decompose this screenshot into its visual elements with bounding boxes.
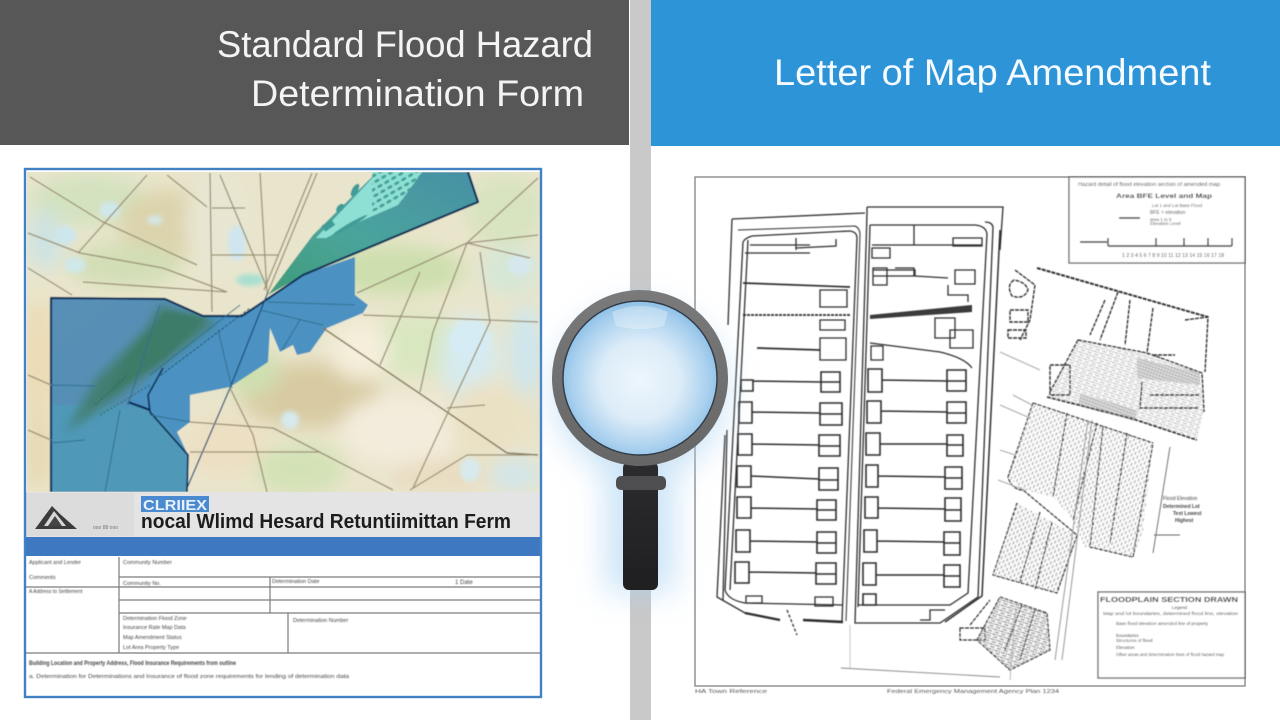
panel: letter of map amendment plan [695,177,1245,695]
icon: magnifying glass [552,290,728,592]
form table: Building Location and Property Address, Flood Insurance Requirements from outline [29,660,236,667]
plan annotation: Determined Lot [1163,504,1200,510]
form table: Lot Area Property Type [123,645,179,651]
inset: elevation detail box [1069,177,1245,263]
form table: 1 Date [455,580,473,586]
inset: elevation detail box: Elevation Level [1150,221,1181,226]
handle [623,462,658,590]
logo [26,493,134,536]
form blue band [26,537,541,556]
legend box: Elevation [1116,645,1135,650]
legend box: FLOODPLAIN SECTION DRAWN [1100,597,1238,604]
site plan: right block rows [863,369,966,605]
site plan: left block [717,213,865,635]
flood zone: green band [66,305,217,432]
form table: Insurance Rate Map Data [123,625,187,631]
form outer frame [25,169,541,697]
legend box [1098,592,1245,678]
lens highlight [612,306,668,329]
form table: A Address to Settlement [29,589,83,595]
form table: Comments [29,575,56,581]
header: Standard Flood Hazard Determination Form: Standard Flood Hazard [217,24,593,65]
legend box: Other areas and determination lines of flood hazard map [1116,652,1224,657]
form title [141,496,511,533]
flood map [20,165,550,495]
lines crossing the flood zone [51,302,355,492]
wedge [870,305,972,319]
site plan: left block rows [735,372,842,584]
header: Letter of Map Amendment [651,0,1280,146]
panel: flood hazard determination form [20,165,550,697]
boundary lines [51,172,478,492]
lens [563,301,717,455]
plan annotation [1163,496,1202,524]
form table: Determination Date [272,579,319,585]
inset: elevation detail box: Area BFE Level and Map [1116,194,1212,200]
form table: a. Determination for Determinations and Insurance of flood zone requirements for lending of determination data [29,674,350,680]
inset: elevation detail box: Lot 1 and Lot Base Flood [1152,203,1203,208]
rim [552,290,728,466]
inset: elevation detail box: 1 2 3 4 5 6 7 8 9 10 11 12 13 14 15 16 17 18 [1122,253,1224,259]
form table [26,556,541,696]
inset: elevation detail box: Hazard detail of flood elevation section of amended map [1078,182,1220,188]
form title: nocal Wlimd Hesard Retuntiimittan Ferm [141,511,511,533]
legend box: Legend [1172,605,1188,610]
plan annotation: Text Lowest [1173,511,1202,517]
form table: Determination Flood Zone [123,616,187,622]
legend box: Boundaries [1116,633,1140,638]
form table: Community No. [123,581,161,587]
plan sheet frame [695,177,1245,686]
plan footer notes: Federal Emergency Management Agency Plan 1234 [887,689,1059,695]
form table: Community Number [123,560,172,566]
flood zone: upper teal channel [268,172,478,295]
site plan: right block [855,207,1003,623]
magnifier glow [554,306,726,592]
form table: Determination Number [293,618,348,624]
header: Standard Flood Hazard Determination Form [0,0,629,145]
legend box: Map and lot boundaries, determined flood line, elevation [1103,611,1239,616]
plan annotation: Flood Elevation [1163,496,1198,502]
roads [28,173,538,492]
legend box: Base flood elevation amended line of property [1116,621,1209,626]
plan footer notes: HA Town Reference [695,689,767,695]
logo: ooo 88 ooo [93,525,118,531]
plan annotation: Highest [1175,518,1194,524]
flood zone: left shade [52,298,216,405]
header: Standard Flood Hazard Determination Form: Determination Form [251,73,584,114]
site plan: north subdivision [1008,268,1208,440]
inset: elevation detail box: BFE = elevation [1150,210,1186,216]
centre divider bar [630,0,651,720]
form table: Applicant and Lender [29,560,81,566]
legend box: Structures of flood [1116,638,1153,643]
collar [616,476,666,490]
inset: elevation detail box: area 1 to 5 [1150,217,1172,222]
form table: Map Amendment Status [123,635,182,641]
site plan: south subdivision [960,403,1153,670]
form header strip [26,492,541,537]
plan footer notes [695,689,1059,695]
header: Letter of Map Amendment: Letter of Map Amendment [774,52,1212,93]
form title: CLRIIEX [143,497,207,514]
flood zone: lower blue area [128,256,368,452]
